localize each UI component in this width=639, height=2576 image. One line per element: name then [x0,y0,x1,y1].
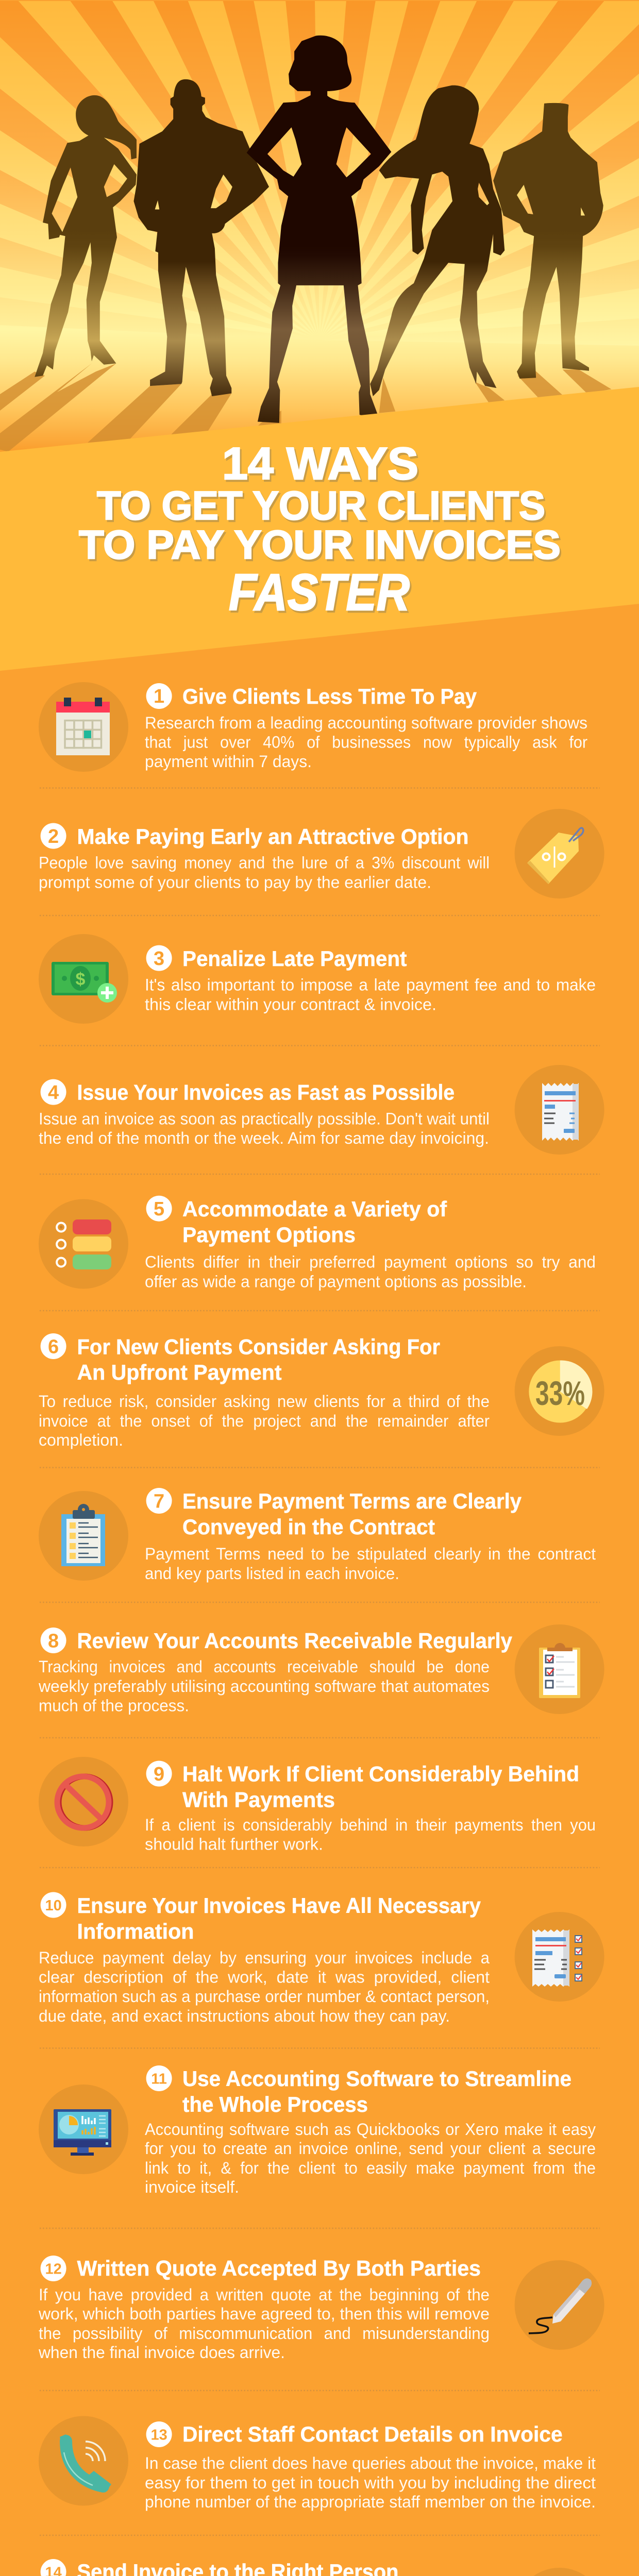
heading 9: Halt Work If Client Considerably Behind [182,1762,579,1786]
heading 7 [182,1489,522,1539]
item 2: paying early [39,809,604,899]
icon: banknote with plus: $ [76,970,86,989]
body 3 [145,976,596,1014]
body 7 [145,1545,596,1583]
body 4: the end of the month or the week. Aim for same day invoicing. [39,1129,489,1147]
body 10: information such as a purchase order number & contact person, [39,1987,490,2006]
badge 4: 4 [48,1082,59,1104]
badge 2: 2 [48,826,59,848]
heading 6: For New Clients Consider Asking For [77,1335,440,1359]
body 8: Tracking invoices and accounts receivable should be done [39,1657,490,1676]
badge 12 [41,2256,66,2281]
badge 3 [146,945,172,971]
badge 3: 3 [154,948,164,970]
title: TO PAY YOUR INVOICES [79,522,561,567]
body 8 [38,1657,490,1715]
body 5: offer as wide a range of payment options as possible. [145,1272,527,1291]
item 9: halt work [39,1757,596,1854]
item 10: necessary information [39,1892,604,2025]
body 10 [39,1948,490,2025]
item 1: give clients less time [39,682,587,772]
heading 11: the Whole Process [182,2092,368,2116]
body 10: due date, and exact instructions about how they can pay. [39,2007,450,2025]
item 4: issue invoices fast [39,1065,604,1155]
heading 13: Direct Staff Contact Details on Invoice [182,2422,563,2446]
body 13 [145,2454,596,2511]
body 12: when the final invoice does arrive. [38,2343,285,2362]
title [79,438,561,621]
body 1: that just over 40% of businesses now typically ask for [145,733,587,751]
heading 5: Accommodate a Variety of [182,1197,447,1221]
icon: banknote with plus [39,934,128,1024]
icon: prohibition sign [39,1757,128,1846]
icon: receipt with checkboxes [515,1912,604,2002]
body 12: work, which both parties have agreed to, then this will remove [38,2304,490,2323]
body 13: phone number of the appropriate staff member on the invoice. [145,2493,596,2511]
icon: 33% pie [515,1346,604,1436]
badge 4 [41,1079,66,1105]
icon: monitor with charts [39,2084,128,2174]
heading 6: An Upfront Payment [77,1360,282,1384]
item 14: right person [39,2559,604,2576]
body 5 [145,1253,596,1291]
body 8: much of the process. [39,1696,189,1715]
title band [0,387,639,671]
badge 5 [146,1196,172,1222]
body 3: this clear within your contract & invoice. [145,995,436,1014]
badge 9: 9 [154,1764,164,1785]
body 4: Issue an invoice as soon as practically possible. Don't wait until [39,1110,490,1128]
item 13: direct contact details [39,2416,596,2511]
body 9 [145,1816,596,1854]
body 1: payment within 7 days. [145,752,312,771]
body 13: easy for them to get in touch with you by including the direct [145,2473,596,2492]
body 2: prompt some of your clients to pay by the earlier date. [39,873,431,891]
body 6: To reduce risk, consider asking new clients for a third of the [39,1392,490,1411]
body 10: clear description of the work, date it was provided, client [39,1968,490,1987]
heading 1: Give Clients Less Time To Pay [182,684,477,708]
badge 9 [146,1761,172,1787]
title: FASTER [229,564,410,621]
item 8: review receivables [38,1624,604,1715]
badge 12: 12 [45,2261,62,2277]
heading 5: Payment Options [182,1223,356,1247]
body 2: People love saving money and the lure of a 3% discount will [39,854,490,872]
body 3: It's also important to impose a late payment fee and to make [145,976,596,994]
icon: checklist [515,1624,604,1714]
badge 2 [41,823,66,849]
heading 5 [182,1197,447,1247]
badge 14 [41,2559,66,2576]
icon: businessman with check [515,2568,604,2576]
icon: 33% pie: 33% [535,1374,585,1412]
item 12: written quote [38,2256,604,2362]
heading 10: Information [77,1919,194,1943]
heading 4: Issue Your Invoices as Fast as Possible [77,1080,455,1105]
body 7: and key parts listed in each invoice. [145,1564,399,1583]
heading 7: Conveyed in the Contract [182,1515,435,1539]
badge 6 [41,1333,66,1359]
icon: calendar [39,682,128,772]
title: TO GET YOUR CLIENTS [97,483,545,528]
body 5: Clients differ in their preferred payment options so try and [145,1253,596,1272]
badge 8 [41,1628,66,1653]
item 7: payment terms [39,1488,596,1583]
body 11 [145,2120,596,2196]
badge 11 [146,2065,172,2091]
badge 13 [146,2421,172,2447]
heading 6 [77,1335,440,1384]
body 4 [39,1110,490,1147]
body 1 [145,714,587,771]
heading 8: Review Your Accounts Receivable Regularly [77,1629,513,1653]
title: 14 WAYS [222,438,418,489]
badge 11: 11 [151,2071,167,2088]
heading 11: Use Accounting Software to Streamline [182,2066,571,2091]
body 11: invoice itself. [145,2178,239,2196]
heading 10: Ensure Your Invoices Have All Necessary [77,1893,481,1918]
icon: option list [39,1199,128,1289]
hero illustration: silhouettes on sunburst [0,0,639,453]
heading 7: Ensure Payment Terms are Clearly [182,1489,522,1513]
body 9: If a client is considerably behind in their payments then you [145,1816,596,1834]
badge 8: 8 [48,1630,59,1652]
badge 1: 1 [154,686,164,707]
body 9: should halt further work. [145,1835,323,1854]
heading 10 [77,1893,481,1943]
body 6 [39,1392,490,1449]
badge 13: 13 [150,2427,167,2443]
icon: receipt [515,1065,604,1155]
badge 7: 7 [154,1491,164,1513]
body 11: Accounting software such as Quickbooks or Xero make it easy [145,2120,596,2139]
body 1: Research from a leading accounting software provider shows [145,714,587,732]
body 2 [39,854,490,891]
body 12 [38,2285,490,2362]
body 6: completion. [39,1431,123,1449]
body 6: invoice at the onset of the project and the remainder after [39,1412,490,1430]
badge 7 [146,1488,172,1514]
body 7: Payment Terms need to be stipulated clearly in the contract [145,1545,596,1563]
item 11: accounting software [39,2065,596,2196]
badge 1 [146,683,172,709]
item 3: penalize late payment [39,934,596,1024]
heading 9: With Payments [182,1788,335,1811]
badge 5: 5 [154,1198,164,1220]
heading 3: Penalize Late Payment [182,946,407,971]
badge 10 [41,1892,66,1918]
body 13: In case the client does have queries about the invoice, make it [145,2454,596,2472]
icon: discount tag [515,809,604,899]
heading 12: Written Quote Accepted By Both Parties [77,2256,481,2280]
badge 10: 10 [45,1897,62,1914]
item 6: upfront payment [39,1333,604,1449]
body 11: link to it, & for the client to easily make payment from the [145,2159,596,2177]
heading 2: Make Paying Early an Attractive Option [77,824,469,849]
icon: telephone [39,2416,128,2506]
body 10: Reduce payment delay by ensuring your invoices include a [39,1948,490,1967]
heading 11 [182,2066,571,2116]
item 5: variety of options [39,1196,596,1291]
heading 9 [182,1762,579,1811]
body 12: If you have provided a written quote at the beginning of the [39,2285,490,2304]
icon: pen with signature [515,2260,604,2350]
body 11: for you to create an invoice online, send your client a secure [145,2139,596,2158]
body 8: weekly preferably utilising accounting software that automates [38,1677,490,1696]
badge 6: 6 [48,1336,59,1358]
icon: clipboard [39,1491,128,1581]
body 12: the possibility of miscommunication and misunderstanding [39,2324,490,2343]
